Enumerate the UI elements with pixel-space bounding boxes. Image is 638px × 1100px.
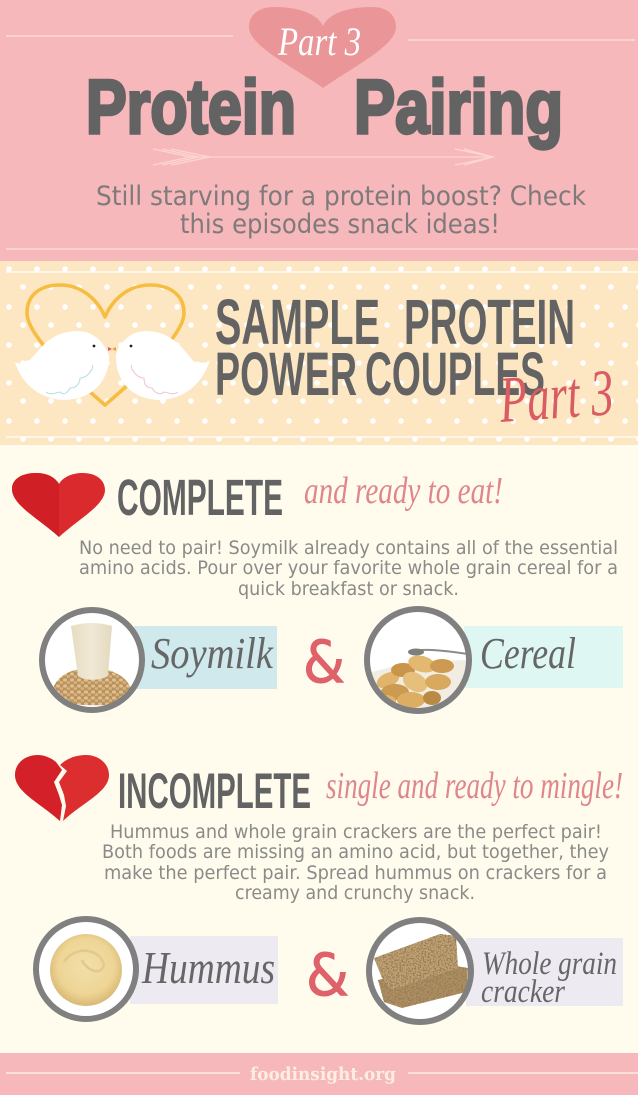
food pair: soymilk [40,608,277,712]
title [86,65,563,150]
icon: right bird [112,331,210,400]
intro text [96,181,586,240]
icon: red heart [12,473,105,537]
icon: left bird [15,331,112,400]
description: incomplete: make the perfect pair. Spread hummus on crackers for a [104,862,607,884]
description: complete: quick breakfast or snack. [238,578,459,600]
intro text: this episodes snack ideas! [180,209,500,240]
intro text: Still starving for a protein boost? Check [96,181,586,212]
description: incomplete [102,821,609,904]
icon: heart outline [27,285,184,405]
food pair: hummus [34,917,278,1021]
icon: heart badge with part number [249,7,396,88]
ampersand: & [303,628,345,696]
ampersand: & [306,941,349,1009]
panel: footer [0,1053,638,1100]
title: Protein [86,65,296,150]
label: whole grain cracker [481,946,617,1010]
food pair: soymilk: Soymilk [151,629,274,678]
heading: incomplete: INCOMPLETE [118,763,311,819]
image: stacked crackers [374,934,468,1008]
footer url: foodinsight.org [250,1064,396,1085]
food pair: whole grain cracker [368,919,623,1023]
food pair: cereal [366,608,623,715]
panel: sample protein power couples banner [0,261,638,445]
panel: header [0,0,638,261]
tagline: and ready to eat: and ready to eat! [304,470,503,512]
heading: complete: COMPLETE [117,469,283,526]
panel: incomplete section [15,755,623,1023]
heading: sample protein power couples: SAMPLE [215,286,380,358]
image: cereal bowl [372,648,466,708]
description: complete [79,537,618,600]
food pair: cereal: Cereal [480,629,576,678]
icon: broken heart [15,755,109,821]
label: whole grain cracker: cracker [481,974,565,1010]
panel: complete section [12,469,623,715]
icon: heart badge with part number: Part 3 [277,19,361,64]
description: incomplete: creamy and crunchy snack. [235,882,475,904]
heading: sample protein power couples: POWER [215,340,357,408]
image: soymilk glass and soybeans [52,623,133,705]
description: incomplete: Both foods are missing an amino acid, but together, they [102,841,609,863]
title: Pairing [354,65,563,150]
food pair: hummus: Hummus [141,942,275,993]
image: hummus bowl [50,934,122,1006]
arrow divider [153,149,493,165]
description: incomplete: Hummus and whole grain crackers are the perfect pair! [110,821,602,843]
heading: sample protein power couples [215,286,575,408]
